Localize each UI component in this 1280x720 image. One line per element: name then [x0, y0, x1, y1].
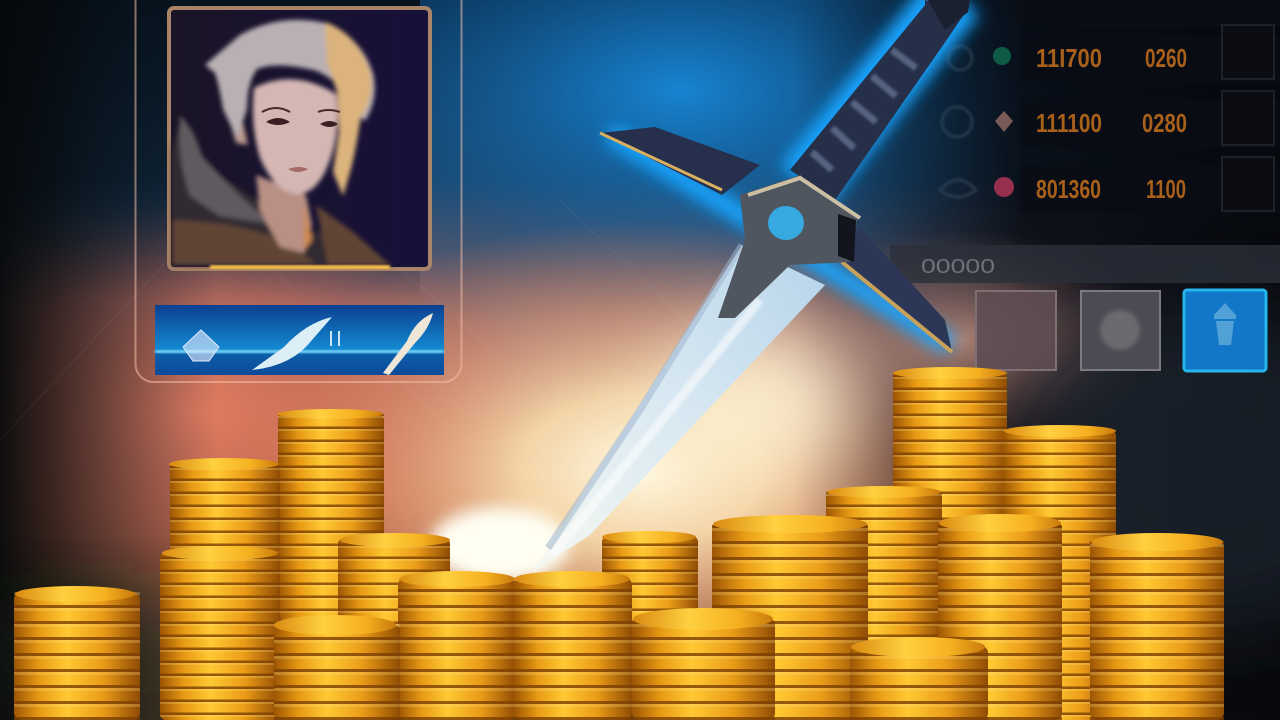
crossguard right — [842, 228, 952, 352]
face — [253, 79, 338, 194]
coin stack — [632, 608, 775, 720]
row 2 values — [995, 108, 1187, 138]
gem — [768, 206, 804, 240]
faint row emblems — [940, 46, 976, 197]
coin stacks back row — [160, 367, 1116, 720]
hair — [205, 20, 375, 139]
coin stack — [277, 409, 384, 620]
slot 2 — [1081, 291, 1160, 370]
icon: dagger — [383, 313, 433, 375]
row 1 values — [993, 43, 1187, 73]
crossguard left — [600, 127, 760, 195]
coin stack — [514, 571, 632, 720]
coin stack — [169, 458, 280, 553]
blade — [533, 245, 825, 572]
coin stack — [850, 637, 988, 720]
coin stack — [826, 486, 942, 651]
icon: lotus — [183, 330, 219, 361]
eyes — [266, 118, 338, 127]
sword — [533, 0, 970, 572]
coin stack — [602, 531, 698, 620]
coin stack — [1003, 425, 1116, 720]
portrait frame — [169, 8, 430, 269]
coin stack — [338, 533, 450, 628]
coin stack — [274, 615, 400, 720]
slot 3 active — [1184, 290, 1266, 371]
row 1 values: 0260 — [1145, 43, 1187, 73]
coin stack — [893, 367, 1007, 532]
slot header text: 00000 — [921, 256, 995, 278]
coin stack — [160, 546, 280, 720]
guard center — [718, 175, 858, 318]
coin stack — [14, 586, 140, 720]
row 1 values: 11I700 — [1036, 43, 1102, 73]
row 3 values: 801360 — [1036, 174, 1101, 204]
coin stack — [398, 571, 516, 720]
sword glow — [610, 0, 955, 345]
grip — [790, 0, 967, 200]
coin stack — [712, 515, 868, 720]
coin stack — [938, 514, 1062, 720]
icon: blade — [252, 317, 332, 370]
coin stack — [1090, 533, 1224, 720]
coin stacks front row — [14, 514, 1224, 720]
panel: game inventory rows — [940, 0, 1280, 213]
panel: character card — [136, 0, 462, 382]
panel: skill slots — [890, 245, 1280, 371]
slot 1 — [976, 291, 1056, 370]
row 3 values — [994, 174, 1186, 204]
row 2 values: 0280 — [1142, 108, 1187, 138]
row 2 values: 111100 — [1036, 108, 1102, 138]
item bar — [155, 305, 444, 375]
row 3 values: 1100 — [1146, 174, 1186, 204]
